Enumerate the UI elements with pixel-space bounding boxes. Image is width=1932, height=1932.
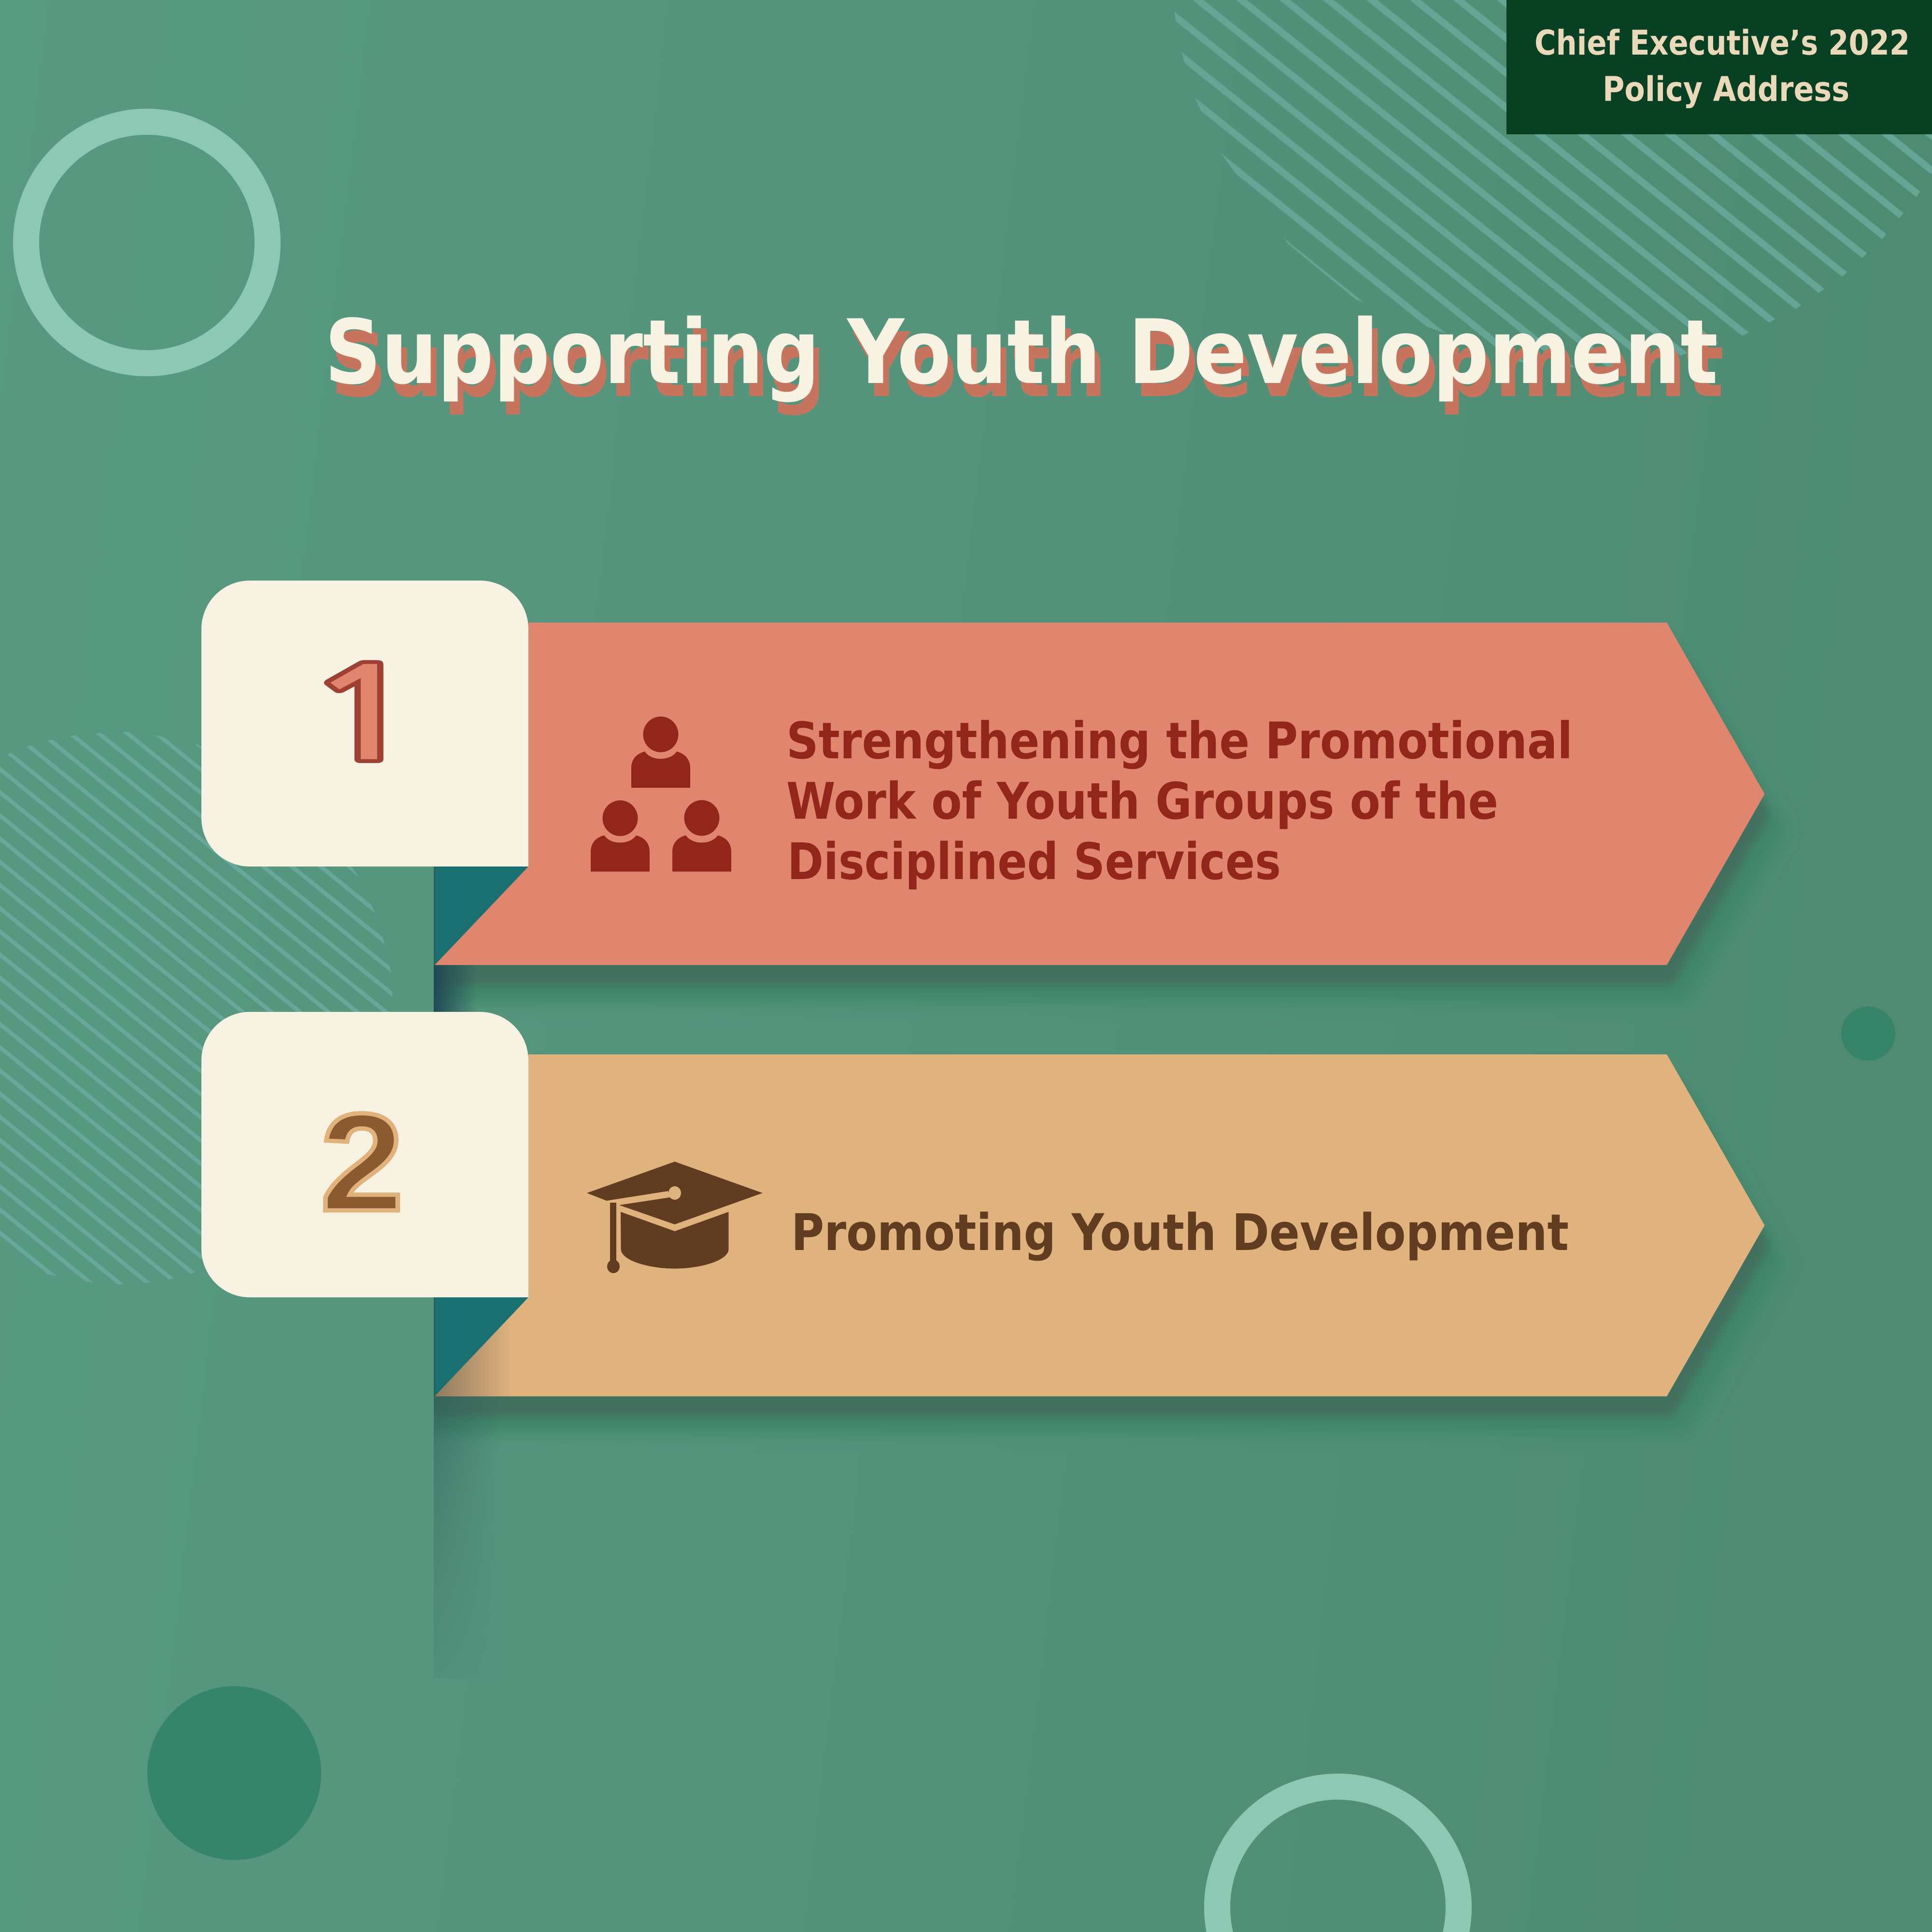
text 1: Disciplined Services	[787, 832, 1281, 891]
ribbon 2 corner shade	[435, 1315, 512, 1396]
text 1: Work of Youth Groups of the	[786, 772, 1498, 831]
teal fold 1	[435, 867, 528, 965]
number card 2	[201, 1012, 528, 1297]
striped blob left	[0, 732, 393, 1284]
ribbon 1	[435, 623, 1765, 965]
icon: three people	[591, 717, 731, 871]
shadow of ribbon 1	[425, 643, 1786, 1012]
ribbon 2	[435, 1054, 1765, 1396]
left cast shadow	[434, 1396, 483, 1637]
fold edge 2	[434, 1297, 435, 1396]
number 1: 1	[300, 652, 428, 781]
decorative dot bottom-left	[147, 1686, 321, 1860]
header tag	[1506, 0, 1932, 134]
text 1: Strengthening the Promotional	[786, 711, 1573, 770]
title: Supporting Youth Development	[325, 301, 1718, 404]
decorative dot right	[1841, 1007, 1895, 1061]
icon: graduation cap	[587, 1162, 763, 1273]
text 2: Promoting Youth Development	[791, 1203, 1569, 1262]
header tag: Policy Address	[1603, 70, 1849, 109]
number 2: 2	[320, 1085, 404, 1240]
striped blob top-right	[1169, 0, 1932, 372]
item 1	[201, 581, 1786, 1012]
shadow of ribbon 2	[425, 1075, 1786, 1434]
number card 1	[201, 581, 528, 867]
item 2	[201, 1012, 1786, 1678]
fold edge 1	[434, 867, 435, 965]
teal fold 2	[435, 1297, 528, 1396]
decorative ring top-left	[26, 122, 268, 363]
text 1	[786, 711, 1573, 891]
decorative ring bottom	[1217, 1787, 1459, 1932]
title: Supporting Youth Development	[330, 314, 1724, 417]
